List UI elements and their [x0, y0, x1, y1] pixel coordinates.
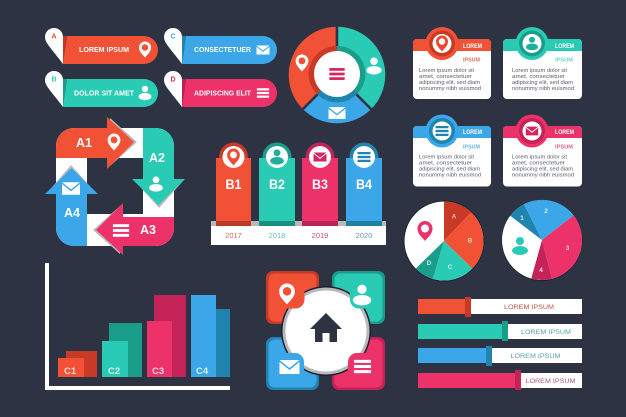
panel: card pink: amet, consectetuer — [512, 160, 565, 166]
pie chart numbers: 3 — [566, 245, 570, 252]
panel: card teal: nonummy nibh euismod — [512, 86, 574, 92]
panel: card teal: LOREM — [555, 44, 574, 50]
bar B1 — [216, 142, 251, 240]
panel: card pink: Lorem ipsum dolor sit — [512, 154, 568, 160]
bar C2: C2 — [108, 366, 120, 377]
bar B2: B2 — [269, 177, 285, 192]
bar 4: LOREM IPSUM — [526, 378, 576, 385]
pill D — [164, 71, 277, 107]
icon: pin — [296, 54, 308, 72]
arrow A4: A4 — [64, 206, 80, 220]
bar B2 — [259, 142, 295, 240]
pie chart letters: D — [427, 260, 432, 267]
bar chart — [45, 263, 230, 390]
cycle diagram — [45, 117, 185, 255]
pie chart numbers: 4 — [539, 267, 543, 274]
panel: label pills — [45, 28, 277, 107]
icon: house — [310, 313, 342, 342]
panel: card teal: adipiscing elit, sed diam — [512, 80, 574, 86]
panel: card red: IPSUM — [463, 58, 480, 64]
hub circle — [281, 286, 371, 376]
pie chart numbers: 2 — [544, 208, 548, 215]
pill A — [45, 28, 158, 64]
arrow A1: A1 — [76, 136, 92, 150]
panel: card blue: IPSUM — [463, 144, 480, 150]
bar 3: LOREM IPSUM — [510, 353, 560, 360]
bar B4 — [346, 142, 382, 240]
icon: menu — [329, 68, 345, 80]
bar B1: 2017 — [225, 231, 242, 240]
timeline base — [211, 221, 386, 245]
pill B — [45, 71, 158, 107]
bar 2: LOREM IPSUM — [521, 329, 571, 336]
pie chart numbers — [502, 200, 582, 281]
pill C — [164, 28, 277, 64]
bar B4: B4 — [356, 177, 372, 192]
panel: card pink — [503, 114, 582, 186]
panel: card teal — [503, 27, 582, 99]
panel: card blue: adipiscing elit, sed diam — [419, 166, 481, 172]
icon: pin — [418, 221, 432, 241]
tile red — [266, 271, 319, 324]
arrow A3: A3 — [140, 223, 156, 237]
bar 1 — [418, 297, 582, 317]
hub diagram — [266, 271, 385, 390]
pill A: LOREM IPSUM — [79, 47, 129, 54]
panel: card blue — [413, 114, 491, 186]
bar B3 — [302, 142, 338, 240]
pill C: CONSECTETUER — [194, 47, 251, 54]
pill D: D — [170, 76, 176, 84]
arrow A2: A2 — [149, 151, 165, 165]
timeline bars — [211, 142, 386, 245]
bar C3 — [147, 295, 186, 377]
panel: card red — [413, 27, 491, 99]
bar C3: C3 — [152, 366, 164, 377]
tile blue — [266, 337, 319, 390]
bar C1 — [58, 351, 97, 377]
panel: card teal: amet, consectetuer — [512, 74, 565, 80]
icon: user — [512, 237, 528, 255]
arrow shadows — [48, 118, 183, 254]
pill A: A — [51, 34, 57, 40]
panel: card teal: IPSUM — [555, 58, 573, 64]
panel: card blue: amet, consectetuer — [419, 160, 472, 166]
bar B3: 2019 — [312, 231, 328, 240]
panel: card teal: Lorem ipsum dolor sit — [512, 68, 568, 74]
panel: card blue: LOREM — [463, 130, 482, 136]
panel: card blue: nonummy nibh euismod — [419, 172, 481, 178]
pie chart letters: A — [452, 214, 457, 220]
pie chart numbers: 1 — [520, 215, 524, 222]
bar C1: C1 — [64, 366, 77, 377]
tile teal — [332, 271, 385, 324]
icon: mail — [328, 107, 346, 119]
panel: card red: adipiscing elit, sed diam — [419, 80, 481, 86]
bar B4: 2020 — [356, 231, 372, 240]
bar C4 — [191, 295, 230, 377]
panel: card blue: Lorem ipsum dolor sit — [419, 154, 475, 160]
bar 3 — [418, 346, 582, 366]
bar 4 — [418, 370, 582, 390]
pill C: C — [170, 34, 176, 40]
panel: card pink: LOREM — [555, 130, 574, 136]
axes — [45, 263, 230, 390]
bar B1: B1 — [226, 177, 242, 192]
bar 1: LOREM IPSUM — [504, 304, 554, 311]
pill B: B — [51, 76, 57, 84]
bar C4: C4 — [196, 366, 209, 377]
panel: card pink: adipiscing elit, sed diam — [512, 166, 574, 172]
progress bars — [418, 297, 582, 390]
pill D: ADIPISCING ELIT — [194, 90, 252, 98]
panel: card red: Lorem ipsum dolor sit — [419, 68, 475, 74]
bar B3: B3 — [312, 177, 328, 192]
pie chart letters — [404, 200, 484, 282]
panel: card red: nonummy nibh euismod — [419, 86, 481, 92]
pill B: DOLOR SIT AMET — [74, 90, 135, 98]
panel: card pink: IPSUM — [555, 144, 573, 150]
pie chart letters: B — [468, 238, 473, 244]
panel: card red: amet, consectetuer — [419, 74, 472, 80]
bar B2: 2018 — [269, 231, 285, 240]
panel: card pink: nonummy nibh euismod — [512, 172, 574, 178]
tile pink — [332, 337, 385, 390]
bar C2 — [102, 323, 142, 377]
panel: card red: LOREM — [463, 44, 482, 50]
donut chart — [288, 26, 386, 124]
pie chart letters: C — [448, 264, 453, 271]
bar 2 — [418, 321, 582, 341]
icon: user — [366, 57, 382, 75]
